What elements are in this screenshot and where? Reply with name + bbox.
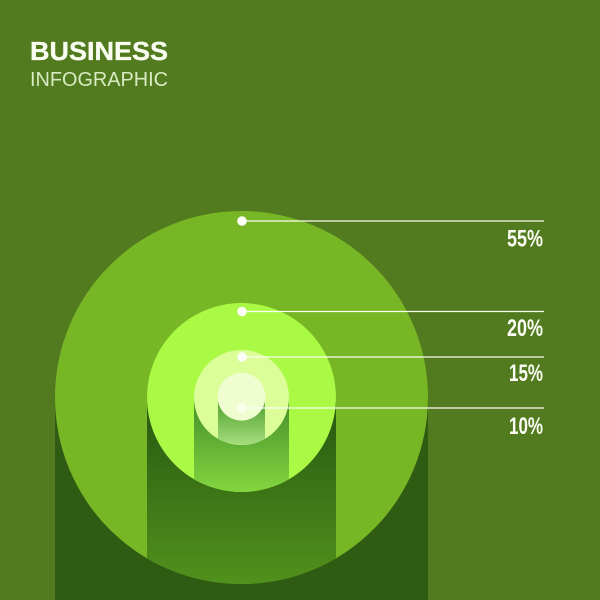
second ring long shadow (147, 397, 336, 587)
leader line 10% (237, 403, 544, 413)
label 15%: 15% (509, 360, 543, 387)
title (30, 36, 168, 91)
third ring 15% (194, 350, 289, 445)
inner circle 10% (218, 373, 265, 421)
label 55%: 55% (507, 226, 543, 252)
leader line 55% (237, 216, 544, 226)
outer ring 55% (55, 211, 428, 584)
title: INFOGRAPHIC (30, 69, 168, 91)
outer ring long shadow (55, 397, 428, 600)
leader line 15% (237, 352, 544, 362)
leader line 20% (237, 307, 544, 316)
ring chart (55, 211, 428, 600)
label 20%: 20% (507, 315, 543, 342)
second ring 20% (147, 303, 336, 492)
inner ring long shadow (218, 402, 265, 445)
label 10%: 10% (509, 413, 543, 440)
third ring long shadow (194, 397, 289, 493)
title: BUSINESS (30, 36, 168, 66)
